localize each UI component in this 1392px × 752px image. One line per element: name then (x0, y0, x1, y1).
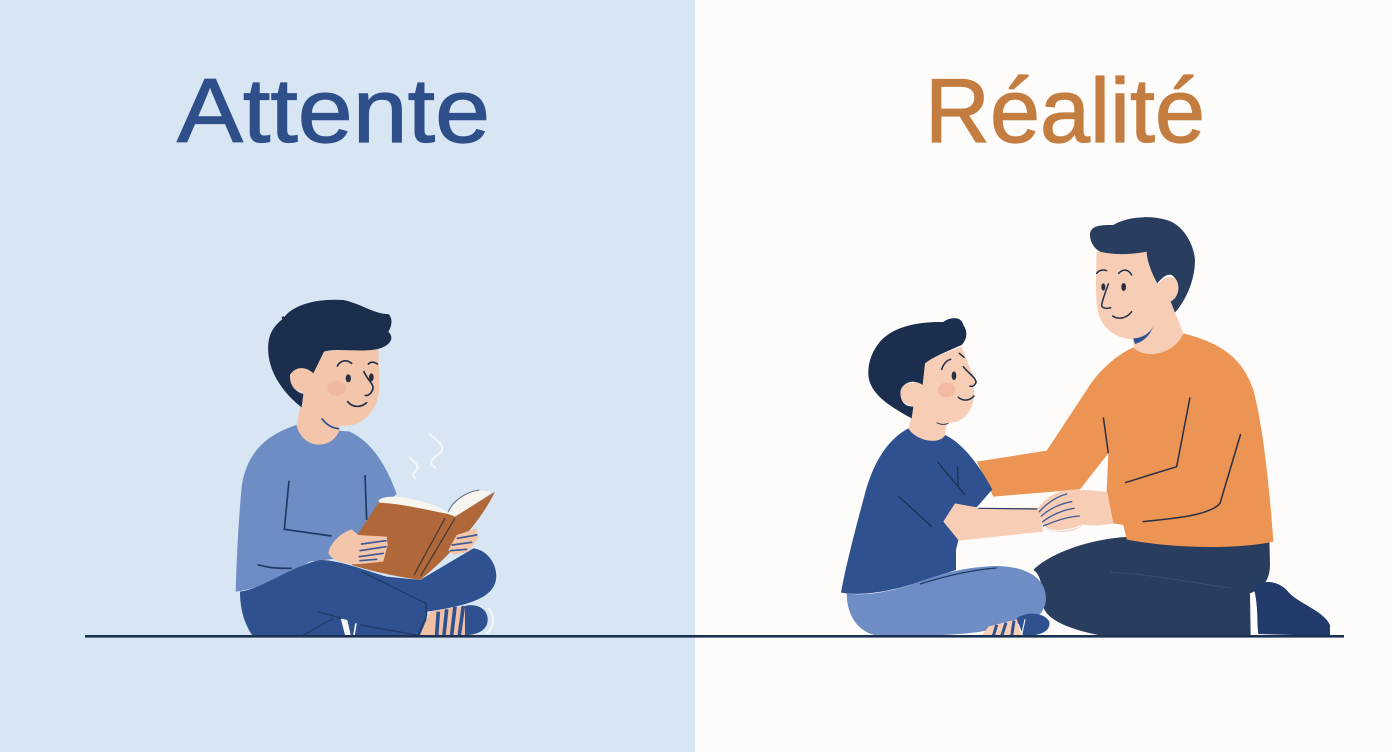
parent face details (1097, 270, 1132, 318)
heading: Attente: Attente (177, 61, 490, 162)
figure: parent and child holding hands (841, 217, 1330, 636)
heading: Réalité: Réalité (925, 61, 1205, 162)
group: child (841, 318, 1049, 636)
sweater (236, 425, 397, 592)
parent hair (1090, 217, 1195, 313)
neck and face (297, 405, 339, 445)
joined hands (1038, 490, 1113, 532)
child foot (982, 619, 1022, 636)
hair (268, 300, 391, 407)
child pants (847, 566, 1046, 636)
figure: boy reading a book (236, 300, 496, 637)
ground line (85, 635, 1344, 638)
group: parent (977, 217, 1330, 636)
child t-shirt (841, 428, 992, 594)
child neck and face (908, 347, 977, 441)
parent shoe (1253, 582, 1330, 636)
parent pants (1033, 537, 1270, 636)
hands (328, 529, 388, 564)
face details (337, 361, 377, 406)
book (352, 490, 495, 580)
child hair (868, 318, 966, 418)
child face details (942, 353, 976, 400)
foot and sock (420, 605, 473, 635)
panel: attente background (0, 0, 695, 752)
parent neck and face (1096, 252, 1183, 354)
panel: realite background (695, 0, 1392, 752)
pants (240, 548, 496, 637)
steam (409, 434, 442, 478)
parent sweater (977, 333, 1273, 547)
child arm (943, 502, 1043, 541)
